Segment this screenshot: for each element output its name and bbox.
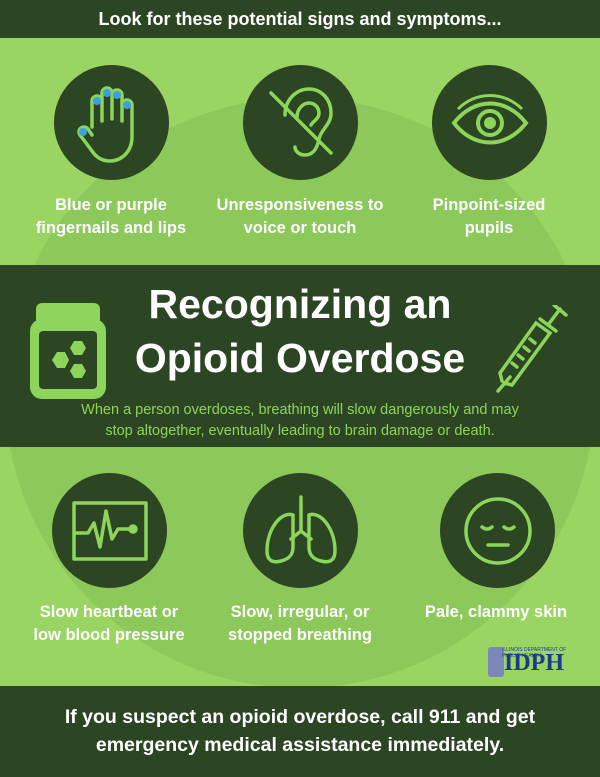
subtitle text: stop altogether, eventually leading to brain damage or death. [105,423,495,439]
label: pupils: pupils [465,219,513,237]
label: fingernails: fingernails and lips [36,219,186,237]
bottom banner [0,686,600,777]
bottom banner: emergency medical assistance immediately. [96,734,504,756]
label: unresponsiveness [217,196,383,237]
title panel [0,265,600,447]
icon: eye [432,65,547,180]
icon: lungs [243,473,358,588]
icon: ear crossed [243,65,358,180]
label: fingernails [36,196,186,237]
logo: IDPH: IDPH [504,650,564,676]
label: breathing [228,603,372,644]
label: pupils [433,196,545,237]
icon: heartbeat monitor [52,473,167,588]
logo: IDPH [488,647,566,677]
label: pupils: Pinpoint-sized [433,196,545,214]
background circle [5,98,595,688]
label: heartbeat [33,603,185,644]
title: Opioid Overdose [135,335,465,381]
title [135,281,465,381]
label: heartbeat: Slow heartbeat or [40,603,178,621]
label: heartbeat: low blood pressure [33,626,185,644]
top banner [0,0,600,38]
label: breathing: stopped breathing [228,626,372,644]
icon: pill jar [30,303,106,399]
label: breathing: Slow, irregular, or [231,603,369,621]
title: Recognizing an [149,281,451,327]
label: unresponsiveness: Unresponsiveness to [217,196,383,214]
subtitle text [81,402,519,439]
top banner: Look for these potential signs and symptoms... [98,9,502,29]
icon: face [440,473,555,588]
icon: hand [54,65,169,180]
icon: syringe [496,305,568,393]
label: fingernails: Blue or purple [55,196,167,214]
subtitle text: When a person overdoses, breathing will slow dangerously and may [81,402,519,418]
logo: IDPH: ILLINOIS DEPARTMENT OF PUBLIC HEALTH [502,647,566,659]
label: skin: Pale, clammy skin [425,603,567,621]
label: unresponsiveness: voice or touch [244,219,356,237]
bottom banner: If you suspect an opioid overdose, call 911 and get [65,706,535,728]
